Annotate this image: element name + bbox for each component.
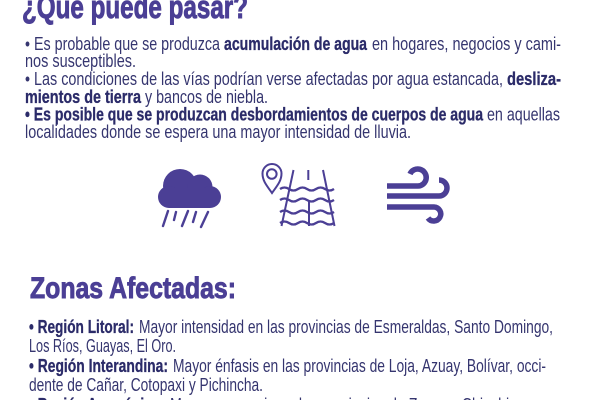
text block: affected regions: • Región Litoral:	[29, 317, 134, 337]
text block: possible effects: nos susceptibles.	[25, 51, 136, 71]
text block: affected regions: Los Ríos, Guayas, El Oro.	[29, 336, 176, 356]
text block: possible effects: acumulación de agua	[224, 34, 368, 54]
text block: possible effects: localidades donde se espera una mayor intensidad de lluvia.	[25, 122, 411, 142]
icon: rain cloud	[158, 169, 221, 227]
heading: zonas afectadas: Zonas Afectadas:	[30, 272, 236, 305]
text block: possible effects: en aquellas	[487, 104, 560, 124]
text block: affected regions: dente de Cañar, Cotopaxi y Pichincha.	[29, 375, 263, 395]
text block: possible effects	[25, 34, 561, 142]
icon: flooded road with location pin	[262, 164, 334, 226]
text block: affected regions: • Región Interandina:	[29, 356, 168, 376]
text block: possible effects: mientos de tierra	[25, 87, 142, 107]
text block: affected regions	[29, 317, 553, 400]
text block: possible effects: desliza-	[507, 69, 561, 89]
panel: zonas afectadas	[29, 272, 553, 400]
text block: possible effects: y bancos de niebla.	[145, 87, 268, 107]
icon: wind	[387, 169, 447, 221]
text block: possible effects: • Es probable que se produzca	[25, 34, 221, 54]
text block: possible effects: • Es posible que se produzcan desbordamientos de cuerpos de agua	[25, 104, 484, 124]
panel: qué puede pasar	[22, 0, 561, 142]
